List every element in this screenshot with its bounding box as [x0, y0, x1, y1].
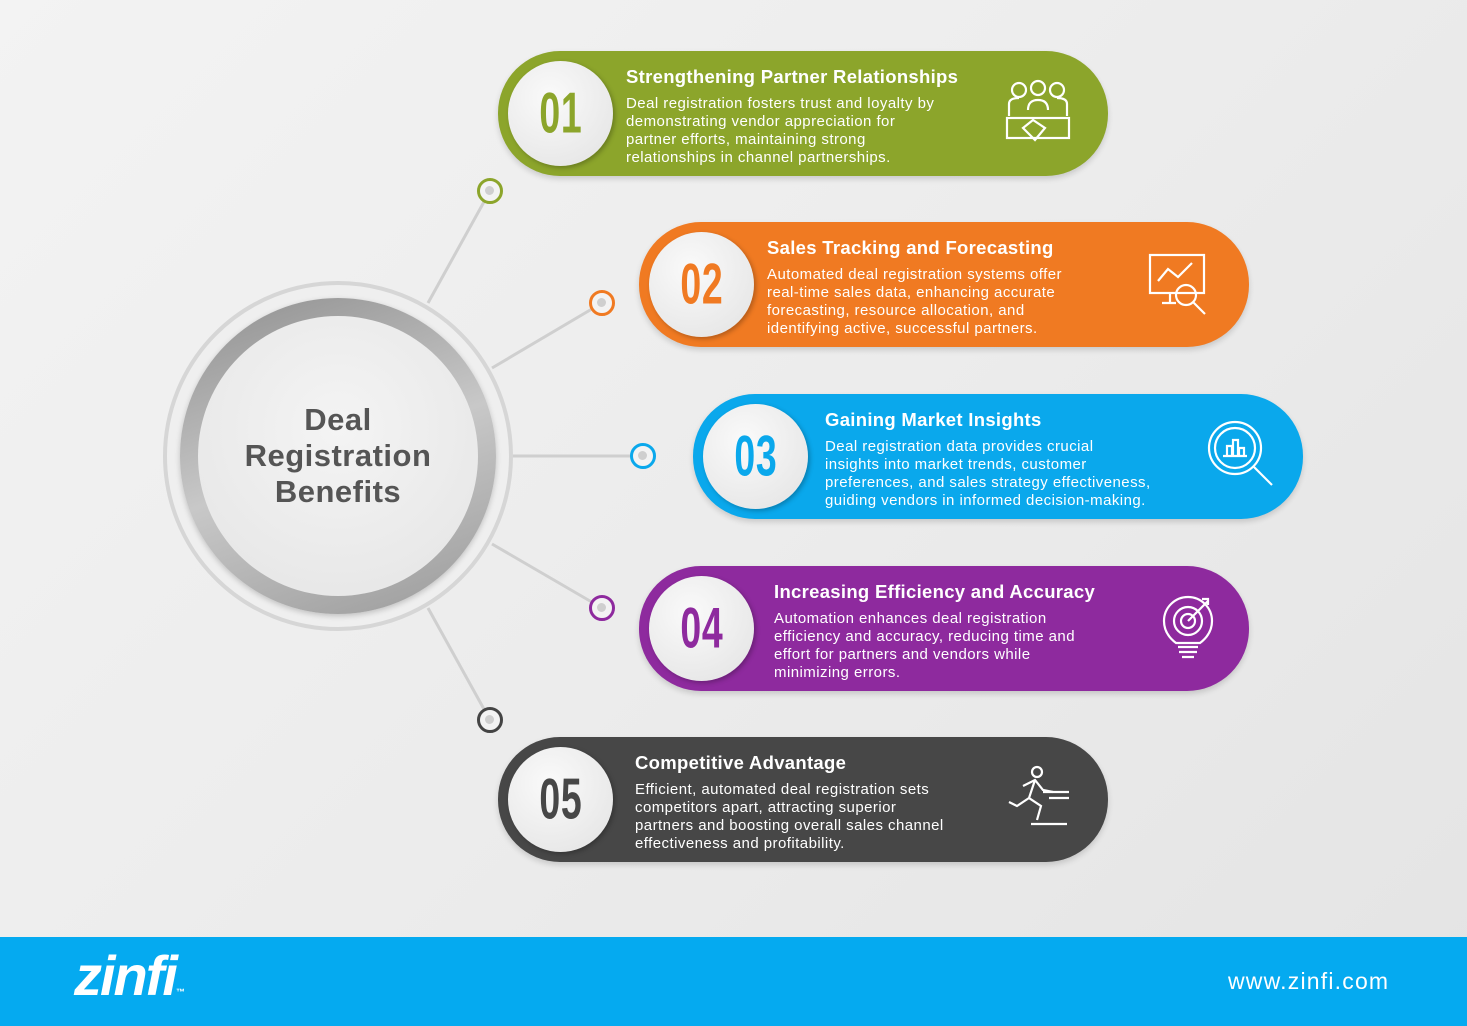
panel 05: effectiveness and profitability. — [635, 835, 845, 852]
panel 03: Deal registration data provides crucial — [825, 438, 1094, 455]
icon: chart magnifier — [1148, 254, 1206, 315]
panel 02: 02 — [680, 253, 723, 316]
icon: analysis magnifier — [1208, 420, 1273, 486]
panel 02: Automated deal registration systems offer — [767, 266, 1062, 283]
panel 02: Sales Tracking and Forecasting — [767, 237, 1054, 258]
panel 04: Automation enhances deal registration — [774, 610, 1047, 627]
icon: handshake team — [1006, 80, 1070, 142]
panel 01 — [498, 51, 1108, 176]
panel 05: Competitive Advantage — [635, 752, 846, 773]
panel 01: demonstrating vendor appreciation for — [626, 113, 895, 130]
panel 05: 05 — [539, 768, 582, 831]
panel 03: preferences, and sales strategy effectiveness, — [825, 474, 1151, 491]
panel 05: partners and boosting overall sales channel — [635, 817, 944, 834]
panel 05: competitors apart, attracting superior — [635, 799, 896, 816]
center title: Registration — [245, 438, 431, 473]
panel 03: Gaining Market Insights — [825, 409, 1042, 430]
panel 04: 04 — [680, 597, 723, 660]
dot 2 — [589, 290, 615, 316]
icon: target bulb — [1162, 596, 1214, 658]
panel 04: minimizing errors. — [774, 664, 900, 681]
panel 01: Deal registration fosters trust and loyalty by — [626, 95, 934, 112]
panel 05: Efficient, automated deal registration sets — [635, 781, 929, 798]
panel 02: forecasting, resource allocation, and — [767, 302, 1025, 319]
panel 02: real-time sales data, enhancing accurate — [767, 284, 1055, 301]
central circle — [163, 281, 513, 631]
panel 03: guiding vendors in informed decision-making. — [825, 492, 1146, 509]
panel 05 — [498, 737, 1108, 862]
panel 03 — [693, 394, 1303, 519]
panel 02 — [639, 222, 1249, 347]
icon: runner — [1008, 766, 1069, 826]
panel 03: 03 — [734, 425, 777, 488]
center title — [245, 402, 431, 509]
panel 04 — [639, 566, 1249, 691]
panel 01: relationships in channel partnerships. — [626, 149, 891, 166]
panel 03: insights into market trends, customer — [825, 456, 1087, 473]
panel 04: efficiency and accuracy, reducing time and — [774, 628, 1075, 645]
logo: zinfi™ — [74, 944, 185, 1007]
panel 01: partner efforts, maintaining strong — [626, 131, 866, 148]
panel 04: effort for partners and vendors while — [774, 646, 1031, 663]
panel 02: identifying active, successful partners. — [767, 320, 1038, 337]
website: www.zinfi.com — [1228, 968, 1389, 994]
center title: Deal — [304, 402, 372, 437]
panel 01: 01 — [539, 82, 582, 145]
dot 1 — [477, 178, 503, 204]
dot 3 — [630, 443, 656, 469]
center title: Benefits — [275, 474, 401, 509]
panel 04: Increasing Efficiency and Accuracy — [774, 581, 1095, 602]
dot 4 — [589, 595, 615, 621]
dot 5 — [477, 707, 503, 733]
panel 01: Strengthening Partner Relationships — [626, 66, 958, 87]
footer bar — [0, 937, 1467, 1026]
